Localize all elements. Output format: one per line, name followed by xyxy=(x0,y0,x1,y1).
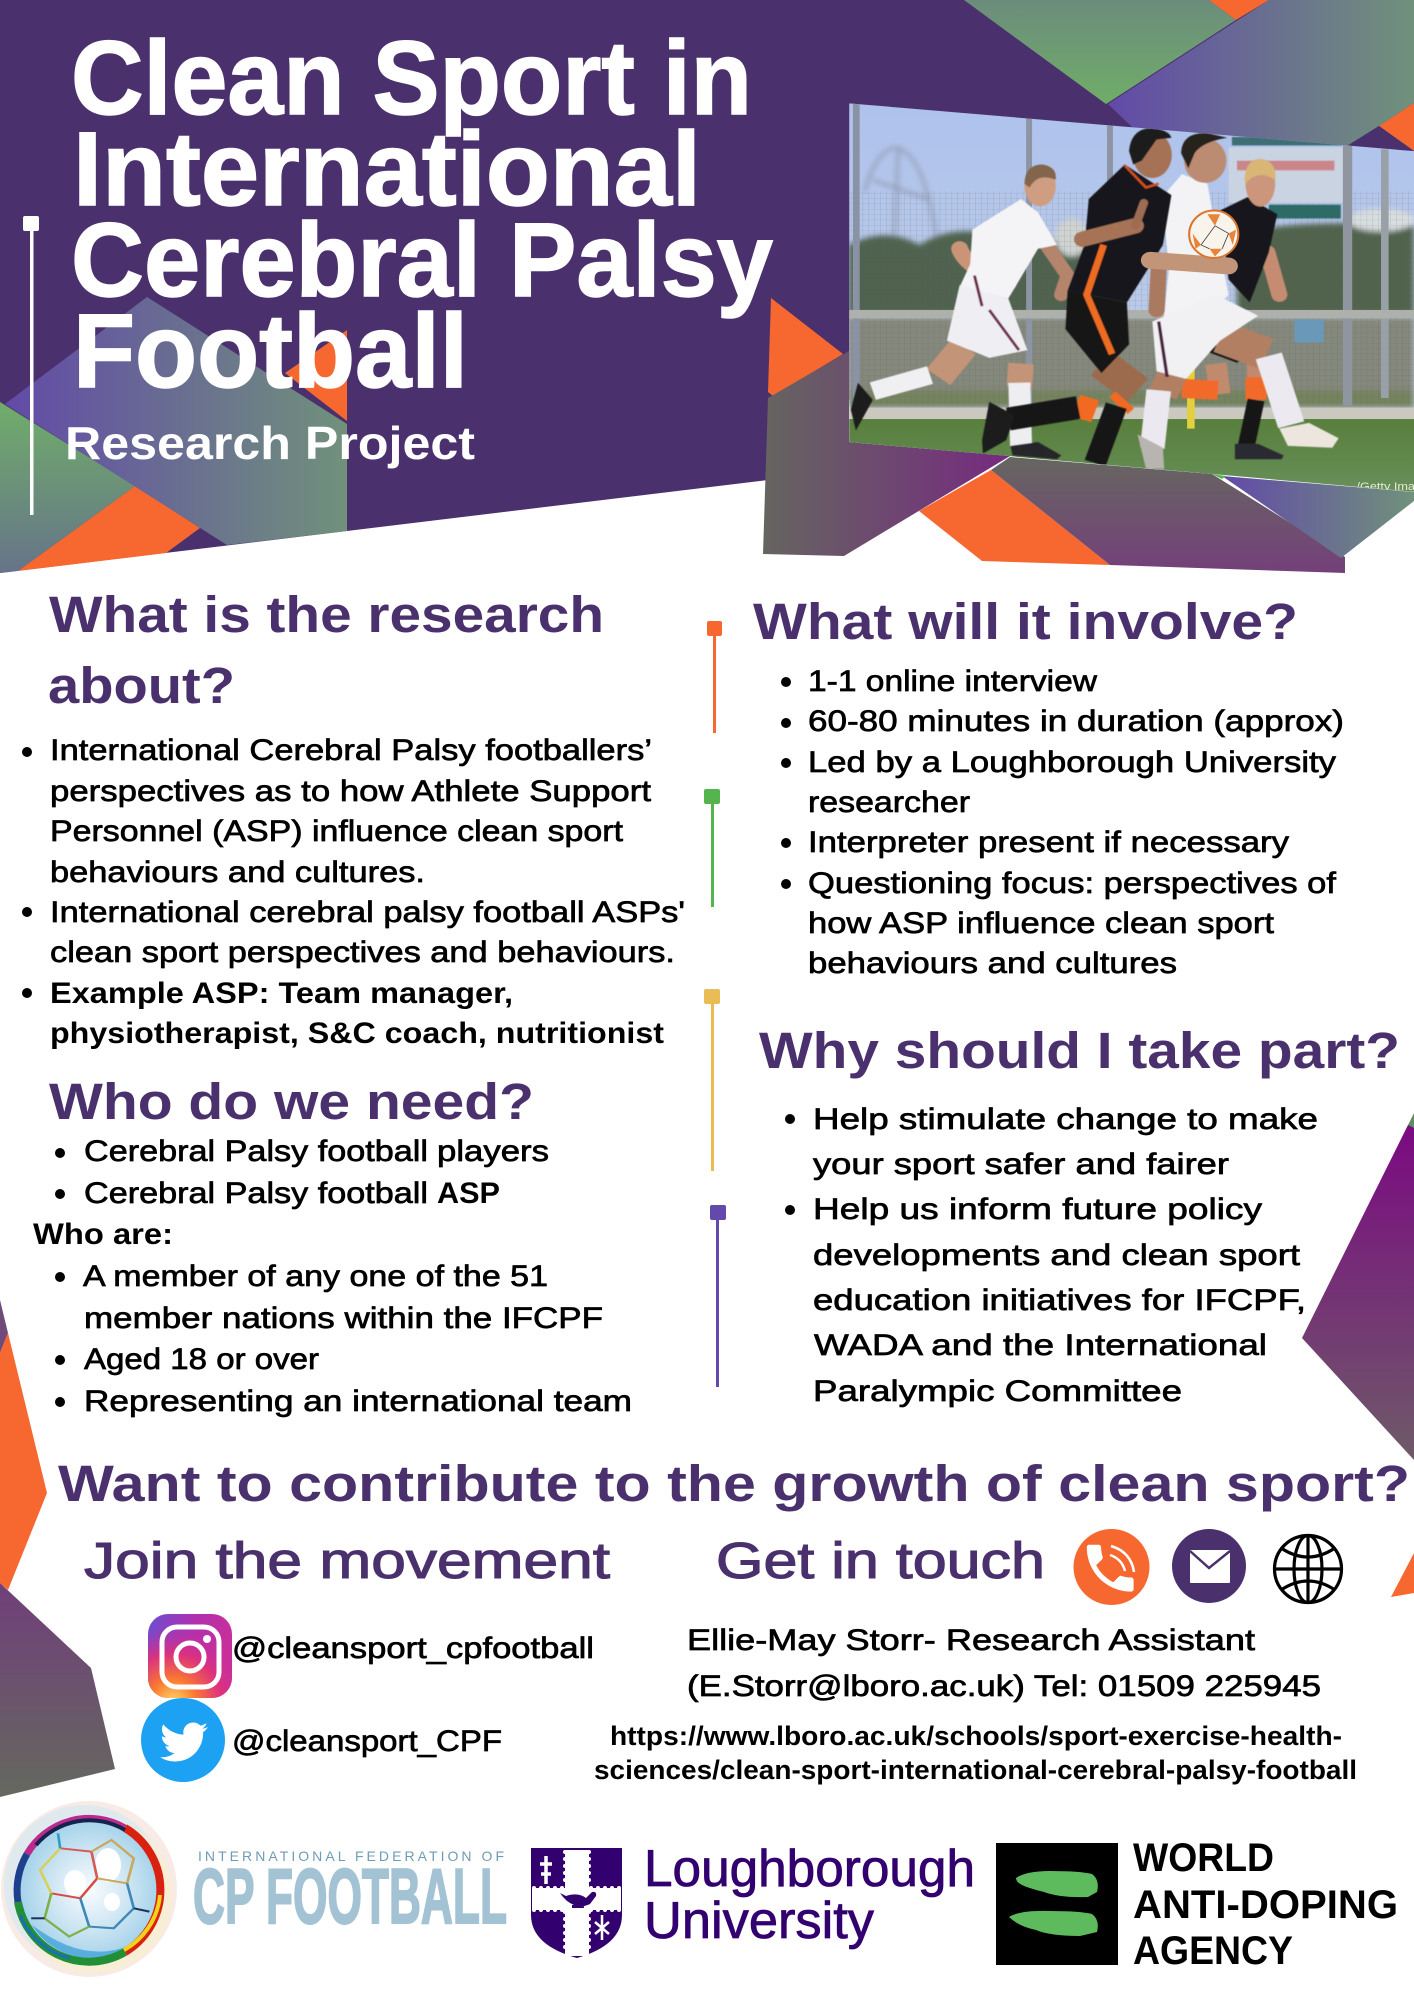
call to action heading: Want to contribute to the growth of clean sport? xyxy=(58,1455,1410,1512)
bullet list: research: behaviours and cultures. xyxy=(50,856,425,889)
heading: what is the research about: What is the research xyxy=(49,586,604,643)
header purple background xyxy=(0,0,1414,573)
bullet list: why take part: Help stimulate change to make xyxy=(813,1103,1318,1136)
text: contact details: Ellie-May Storr- Research Assistant xyxy=(687,1624,1256,1657)
bullet list: research: Example ASP: Team manager, xyxy=(50,977,513,1010)
icon: instagram xyxy=(148,1614,232,1698)
text: website url: https://www.lboro.ac.uk/schools/sport-exercise-health- xyxy=(610,1721,1342,1751)
bullet list: why take part: Help us inform future policy xyxy=(813,1193,1262,1226)
bullet list: involve: how ASP influence clean sport xyxy=(808,907,1275,940)
bullet list: involve: Interpreter present if necessary xyxy=(808,826,1289,859)
bullet list: who do we need: Cerebral Palsy football xyxy=(84,1177,428,1210)
bullet list: who do we need: Cerebral Palsy football xyxy=(84,1135,428,1168)
heading: what is the research about xyxy=(48,586,604,714)
player: England left xyxy=(851,165,1068,459)
bullet list: why take part: your sport safer and fairer xyxy=(813,1148,1229,1181)
bullet list: research: International Cerebral Palsy footballers’ xyxy=(50,734,652,767)
icon: envelope xyxy=(1172,1529,1246,1603)
icon: globe xyxy=(1274,1535,1342,1603)
timeline marker: orange xyxy=(707,621,722,733)
timeline marker: purple xyxy=(710,1205,726,1387)
logo: Loughborough University wordmark: University xyxy=(644,1892,874,1950)
logo: WADA wordmark: ANTI-DOPING xyxy=(1133,1883,1398,1927)
bullet list: research: perspectives as to how Athlete Support xyxy=(50,775,652,808)
text: website url xyxy=(594,1721,1357,1785)
bullet list: research: Personnel (ASP) influence clean sport xyxy=(50,815,624,848)
logo: WADA mark xyxy=(996,1843,1118,1965)
bullet list: why take part xyxy=(785,1103,1318,1408)
icon: phone xyxy=(1074,1529,1150,1605)
bullet list: research: International cerebral palsy football ASPs' xyxy=(50,896,685,929)
subtitle: Research Project xyxy=(65,417,475,469)
bullet list: involve: behaviours and cultures xyxy=(808,947,1177,980)
heading: why should I take part: Why should I take part? xyxy=(759,1022,1400,1079)
title: Football xyxy=(73,293,468,410)
bullet list: who do we need: Representing an international team xyxy=(84,1385,632,1418)
text: instagram handle: @cleansport_cpfootball xyxy=(232,1632,594,1665)
bullet list: involve: 1-1 online interview xyxy=(808,665,1097,698)
heading: get in touch: Get in touch xyxy=(716,1532,1045,1589)
logo: WADA wordmark: AGENCY xyxy=(1133,1929,1293,1973)
bullet list: why take part: developments and clean sport xyxy=(813,1239,1301,1272)
logo: IFCPF ball xyxy=(1,1801,177,1977)
text: contact details xyxy=(687,1624,1321,1703)
logo: Loughborough University wordmark xyxy=(644,1840,975,1950)
panel: what will it involve xyxy=(753,593,1344,980)
heading: who do we need: Who do we need? xyxy=(49,1073,534,1130)
heading: what will it involve: What will it involve? xyxy=(753,593,1298,650)
bullet list: who do we need: member nations within the IFCPF xyxy=(84,1302,603,1335)
logo: CP Football wordmark: INTERNATIONAL FEDERATION OF xyxy=(198,1848,504,1864)
decorative shapes: right middle xyxy=(1302,1113,1414,1597)
bullet list: who do we need: ASP xyxy=(437,1177,500,1210)
bullet list: involve: Led by a Loughborough University xyxy=(808,746,1336,779)
logo: CP Football wordmark: CP FOOTBALL xyxy=(193,1852,507,1940)
bullet list: who do we need xyxy=(33,1135,632,1418)
timeline marker: green xyxy=(704,789,720,907)
bullet list: research: physiotherapist, S&C coach, nutritionist xyxy=(50,1017,664,1050)
panel: what is the research about xyxy=(22,586,685,1050)
bullet list: why take part: education initiatives for IFCPF, xyxy=(813,1284,1306,1317)
timeline marker: yellow xyxy=(704,989,720,1171)
heading: join the movement: Join the movement xyxy=(84,1532,610,1589)
heading: what is the research about: about? xyxy=(48,657,235,714)
bullet list: why take part: WADA and the International xyxy=(814,1329,1267,1362)
title: International xyxy=(73,111,701,228)
bullet list: involve: researcher xyxy=(808,786,970,819)
logo: Loughborough University wordmark: Loughborough xyxy=(644,1840,975,1898)
player: England right xyxy=(1138,133,1339,469)
bullet list: why take part: Paralympic Committee xyxy=(813,1375,1182,1408)
bullet list: involve xyxy=(781,665,1344,980)
bullet list: who do we need: players xyxy=(437,1135,549,1168)
logo: Loughborough shield xyxy=(531,1848,622,1958)
decorative shapes: header left xyxy=(0,297,347,573)
text: twitter handle: @cleansport_CPF xyxy=(232,1725,502,1758)
photo: football match xyxy=(849,100,1414,494)
title: Cerebral Palsy xyxy=(71,202,773,319)
text: contact details: (E.Storr@lboro.ac.uk) Tel: 01509 225945 xyxy=(687,1670,1321,1703)
bullet list: research xyxy=(22,734,685,1050)
bullet list: involve: 60-80 minutes in duration (approx) xyxy=(808,705,1344,738)
logo: WADA wordmark xyxy=(1133,1836,1398,1973)
bullet list: who do we need: Who are: xyxy=(33,1218,173,1251)
bullet list: who do we need: A member of any one of the 51 xyxy=(83,1260,548,1293)
bullet list: who do we need: Aged 18 or over xyxy=(84,1343,319,1376)
logo: WADA wordmark: WORLD xyxy=(1133,1836,1274,1880)
panel: why should I take part xyxy=(759,1022,1400,1408)
decorative shapes: header right top xyxy=(964,0,1414,151)
text: website url: sciences/clean-sport-international-cerebral-palsy-football xyxy=(594,1755,1357,1785)
logo: CP Football wordmark xyxy=(193,1848,507,1940)
icon: twitter xyxy=(141,1698,225,1782)
white vertical marker xyxy=(23,216,39,515)
bullet list: research: clean sport perspectives and behaviours. xyxy=(50,936,675,969)
panel: who do we need xyxy=(33,1073,632,1418)
player: Netherlands centre xyxy=(982,128,1172,463)
player: Netherlands back xyxy=(1182,159,1284,459)
title: Clean Sport in xyxy=(71,20,752,137)
bullet list: involve: Questioning focus: perspectives of xyxy=(808,867,1337,900)
decorative shapes: left middle xyxy=(0,1300,115,1797)
football xyxy=(1150,210,1238,266)
decorative shapes: header right lower xyxy=(763,298,1414,573)
title xyxy=(71,20,773,410)
